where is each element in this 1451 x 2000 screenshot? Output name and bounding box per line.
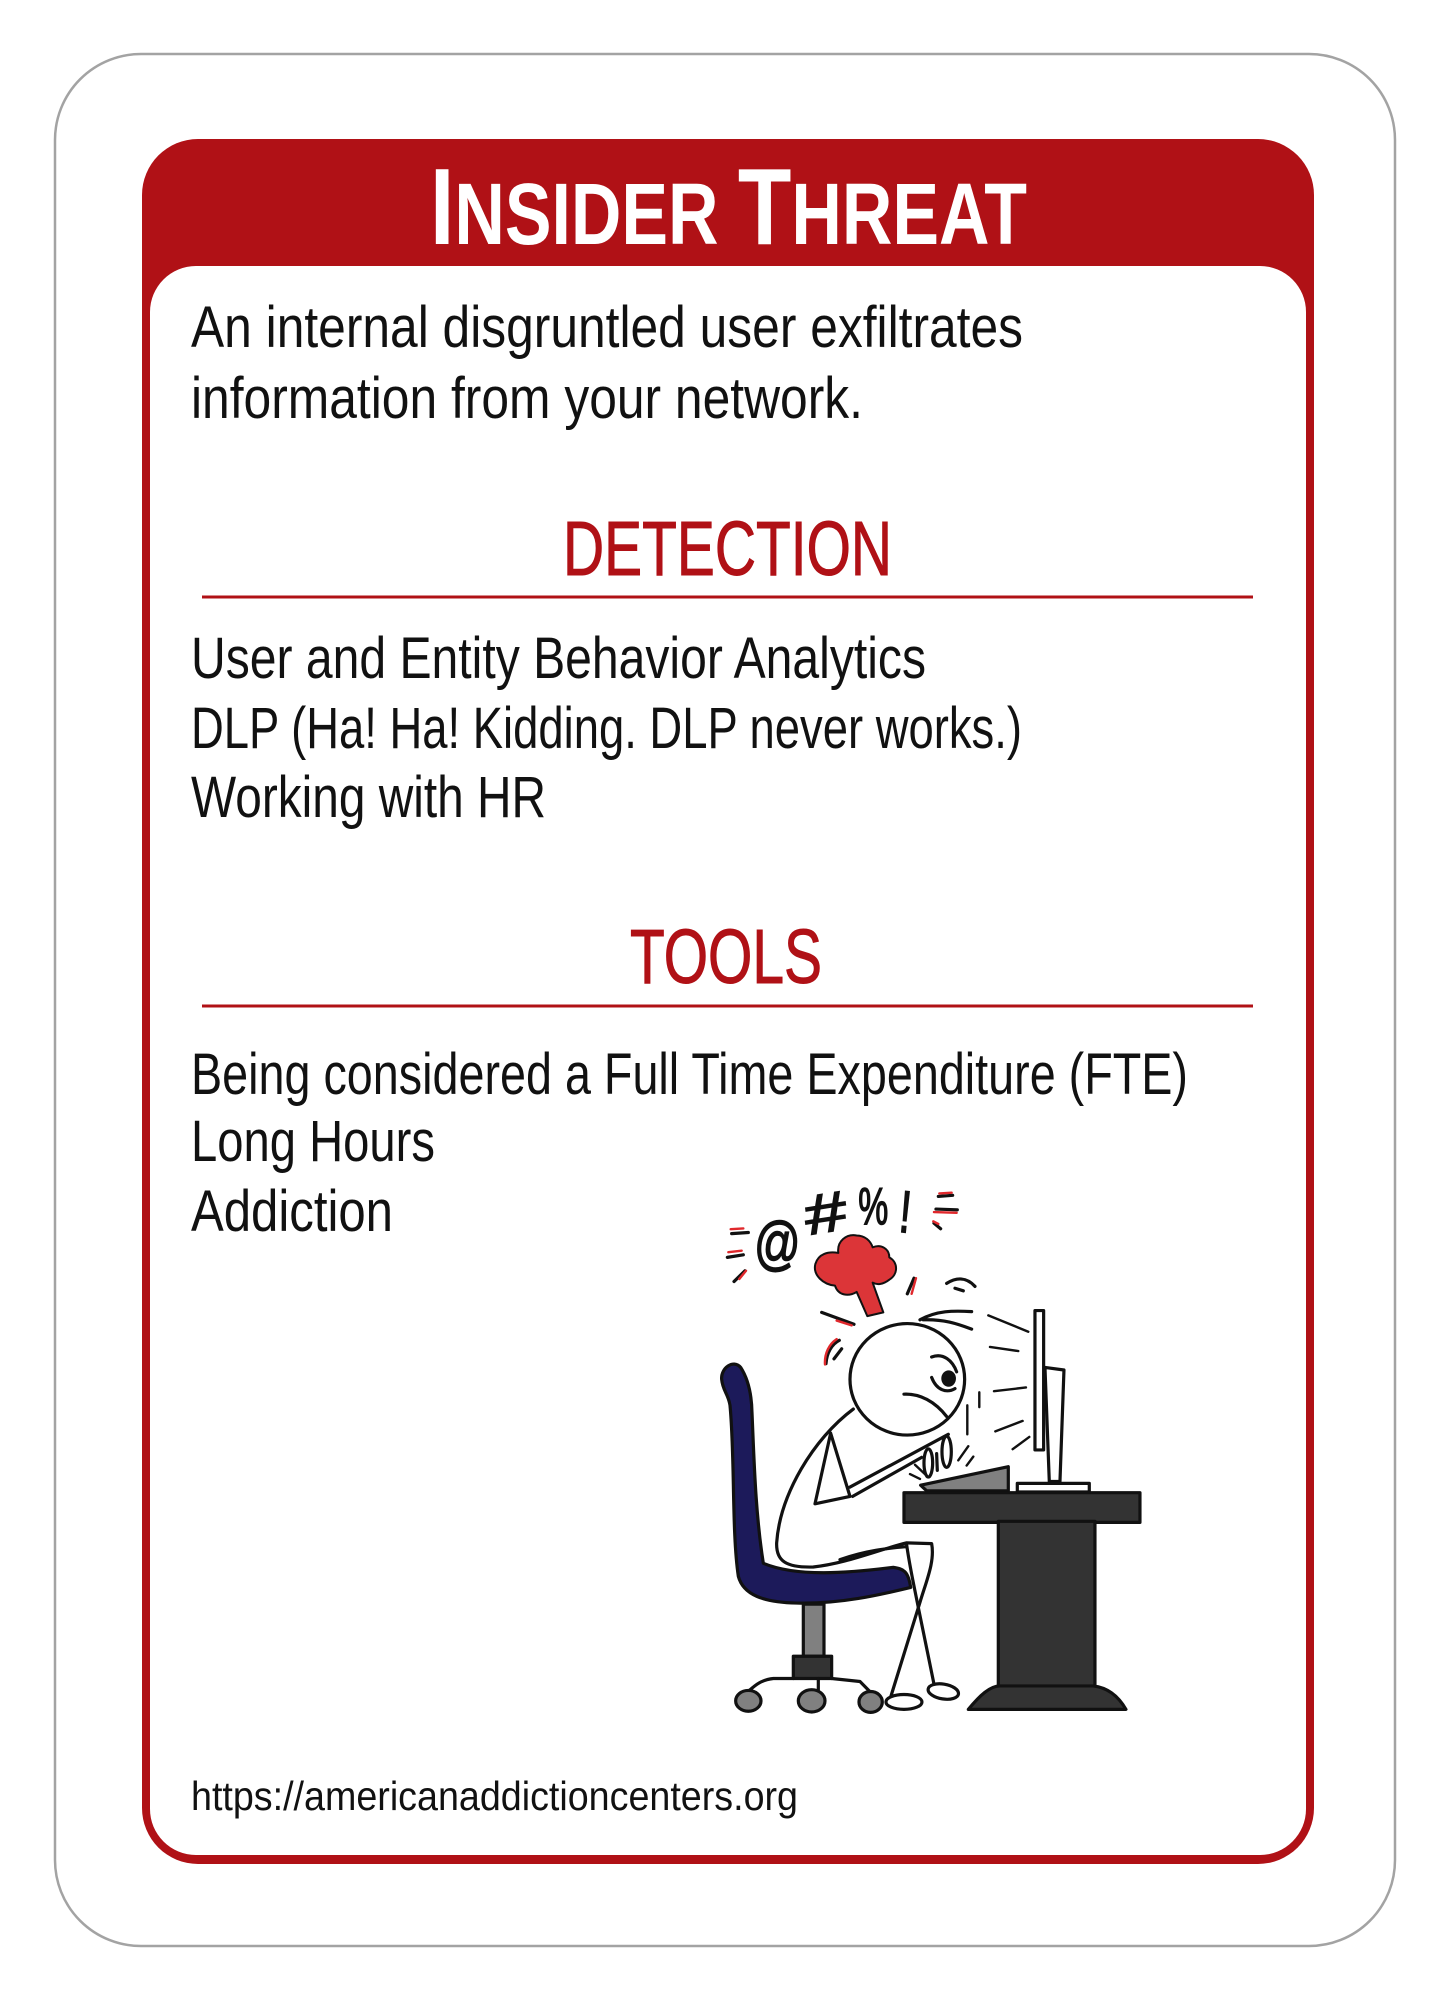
heading: detection: DETECTION	[563, 506, 892, 592]
icon: stick figure body	[777, 1409, 959, 1709]
text block: tools list	[191, 1042, 1188, 1244]
icon: symbols of swearing: @	[754, 1210, 801, 1276]
panel: red card frame	[142, 139, 1314, 1864]
icon: symbols of swearing: !	[897, 1178, 914, 1245]
text block: description: An internal disgruntled user exfiltrates	[191, 295, 1023, 360]
icon: surprise marks	[727, 1193, 975, 1364]
icon: red steam cloud	[815, 1235, 896, 1316]
icon: keyboard	[921, 1467, 1008, 1491]
icon: computer monitor	[1017, 1311, 1089, 1492]
heading: detection	[202, 506, 1253, 598]
icon: symbols of swearing: %	[858, 1178, 888, 1236]
icon: motion lines	[910, 1315, 1029, 1479]
text block: description: information from your network.	[191, 366, 863, 431]
icon: symbols of swearing	[754, 1178, 914, 1276]
text block: detection list	[191, 626, 1022, 830]
title: INSIDER THREAT	[430, 146, 1027, 268]
icon: symbols of swearing: #	[801, 1180, 851, 1248]
text block: detection list: Working with HR	[191, 765, 546, 830]
text block: tools list: Being considered a Full Time Expenditure (FTE)	[191, 1042, 1188, 1107]
panel: white card body	[150, 266, 1306, 1855]
icon: desk	[904, 1493, 1140, 1709]
text block: detection list: User and Entity Behavior Analytics	[191, 626, 926, 691]
heading: tools	[202, 914, 1253, 1008]
heading: tools: TOOLS	[630, 914, 822, 1000]
illustration: frustrated stick figure at computer	[722, 1178, 1140, 1712]
icon: head with angry face	[850, 1311, 972, 1435]
icon: office chair	[722, 1364, 911, 1712]
text block: detection list: DLP (Ha! Ha! Kidding. DLP never works.)	[191, 696, 1022, 761]
source url: https://americanaddictioncenters.org	[191, 1773, 798, 1819]
text block: tools list: Addiction	[191, 1179, 393, 1244]
text block: description	[191, 295, 1023, 431]
text block: tools list: Long Hours	[191, 1109, 435, 1174]
